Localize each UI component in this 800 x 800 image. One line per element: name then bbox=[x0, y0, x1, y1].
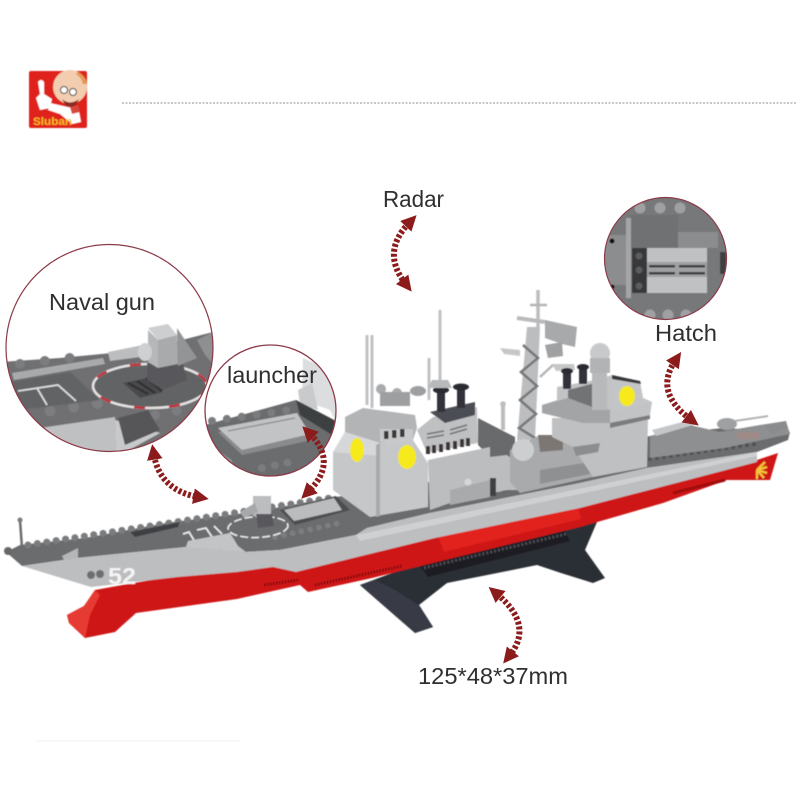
logo: Sluban bbox=[29, 70, 87, 128]
arrow: launcher bbox=[309, 434, 324, 491]
aft superstructure bbox=[510, 343, 652, 493]
stud row bbox=[20, 358, 180, 415]
warship model bbox=[4, 290, 790, 638]
top dashed divider bbox=[122, 102, 797, 104]
forward superstructure bbox=[333, 310, 520, 517]
propeller bbox=[757, 462, 767, 479]
grey deck bbox=[4, 428, 790, 566]
funnels bbox=[430, 384, 475, 423]
red hull bbox=[67, 453, 778, 638]
stern armament bbox=[650, 416, 790, 458]
label: Naval gun: Naval gun bbox=[49, 289, 155, 315]
mast with radar bbox=[500, 290, 577, 440]
yellow emblems bbox=[350, 438, 364, 462]
inset: naval gun bbox=[0, 244, 220, 460]
inset: launcher bbox=[205, 345, 340, 480]
label: launcher: launcher bbox=[227, 362, 317, 388]
arrow: naval gun bbox=[154, 455, 198, 497]
label: Hatch: Hatch bbox=[655, 320, 717, 346]
arrow: radar bbox=[394, 223, 409, 283]
label: Radar: Radar bbox=[383, 186, 444, 212]
naval gun bbox=[240, 496, 274, 528]
arrow: dimensions bbox=[497, 594, 519, 655]
light grey hull side bbox=[22, 452, 757, 589]
display stand bbox=[360, 522, 605, 633]
helipad ring bbox=[93, 364, 207, 408]
inset: hatch bbox=[604, 196, 728, 320]
light grey hull side: 52 bbox=[108, 563, 136, 589]
antennas bbox=[367, 310, 440, 408]
logo: Sluban: Sluban bbox=[33, 116, 72, 128]
helipad markings bbox=[183, 515, 289, 542]
missile launcher bbox=[280, 496, 350, 525]
bow mast bbox=[4, 518, 22, 555]
arrow: hatch bbox=[667, 361, 690, 419]
turret bbox=[108, 324, 197, 390]
label: dimensions: 125*48*37mm bbox=[418, 663, 568, 689]
